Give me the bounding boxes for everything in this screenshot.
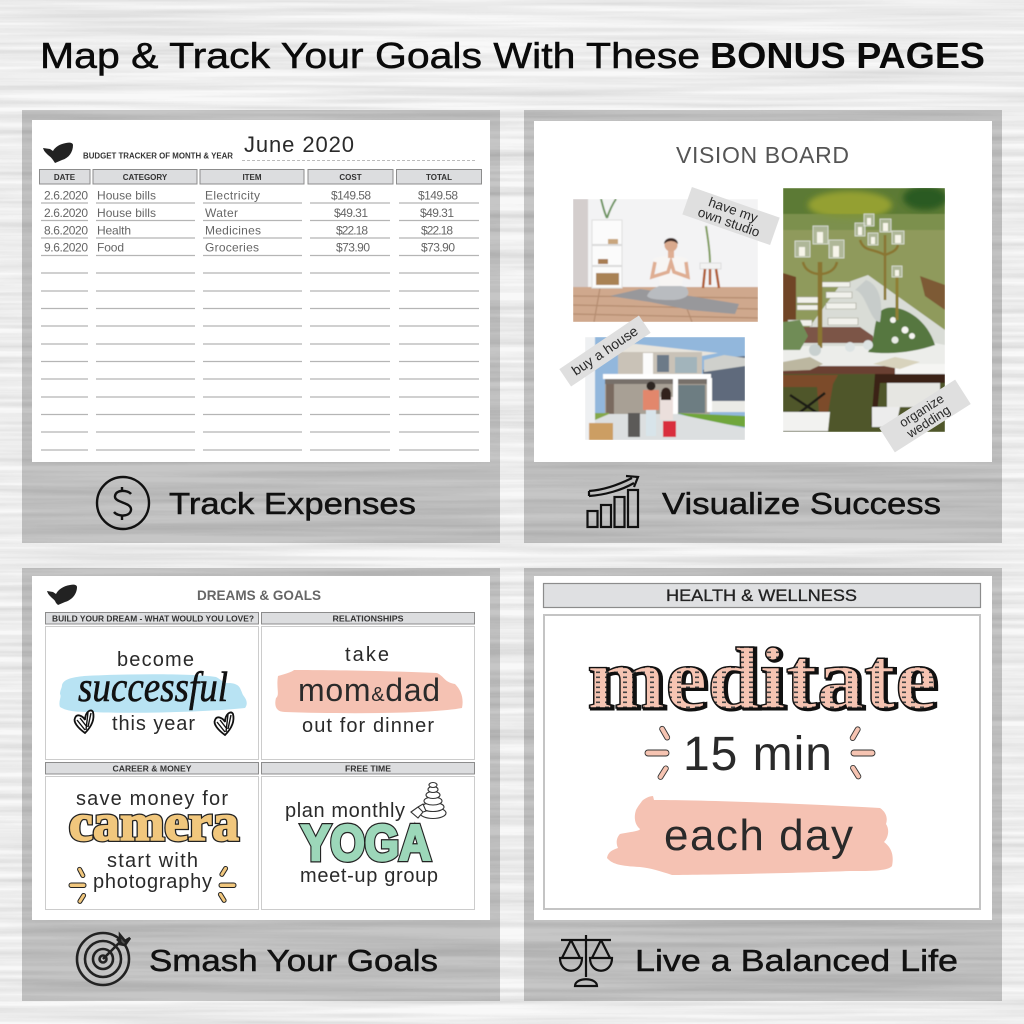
table header: CATEGORY	[123, 173, 168, 182]
goal cell: career and money: camera	[69, 795, 239, 852]
table rows: $22.18	[421, 224, 453, 238]
title: Map & Track Your Goals With These	[40, 35, 700, 76]
brush: pink	[275, 670, 463, 713]
photo: wedding table	[783, 186, 947, 432]
label: have my own studio: have my	[707, 194, 760, 225]
table rows: $49.31	[334, 206, 368, 220]
goal cell: career and money: start with	[107, 850, 198, 872]
table rows: $73.90	[336, 240, 370, 254]
goal cell: free time: FREE TIME	[345, 764, 391, 774]
photo: yoga studio	[573, 199, 758, 322]
label: have my own studio: own studio	[696, 204, 762, 240]
panel: visualize success	[524, 110, 1002, 543]
label: organize wedding: wedding	[903, 402, 953, 441]
panel: track expenses	[22, 110, 500, 543]
dreams and goals heading: DREAMS & GOALS	[197, 587, 321, 603]
decorative bursts	[69, 866, 236, 904]
goal cell: career and money: camera	[69, 795, 239, 852]
title: BONUS PAGES	[710, 35, 985, 76]
text: each day: each day	[664, 811, 853, 860]
dashed rule	[242, 160, 477, 162]
table rows: $73.90	[421, 240, 455, 254]
goal cell: relationships: mom&dad	[298, 672, 440, 708]
table rows: $49.31	[420, 206, 454, 220]
health and wellness header: HEALTH & WELLNESS	[666, 586, 857, 605]
goal cell: relationships	[262, 612, 474, 760]
icon: dollar	[97, 477, 149, 529]
icon: whale logo	[43, 143, 73, 163]
icon: balance scales	[560, 935, 612, 986]
frame	[544, 615, 980, 909]
icon: heart right	[215, 712, 234, 735]
table rows: Water	[205, 206, 238, 220]
goal cell: dream	[46, 612, 258, 760]
table rows: 2.6.2020	[44, 206, 88, 220]
text: 15 min: 15 min	[683, 728, 832, 781]
word: meditate: meditate	[589, 632, 939, 729]
title	[40, 35, 985, 76]
label: buy a house: buy a house	[569, 323, 641, 379]
goal cell: dream: successful	[78, 665, 228, 711]
month heading: June 2020	[244, 132, 354, 157]
goal cell: career and money	[46, 762, 258, 910]
goal cell: dream: this year	[112, 713, 195, 735]
table header: DATE	[54, 173, 76, 182]
label: have my own studio	[682, 187, 780, 245]
word: meditate: meditate	[587, 631, 937, 728]
table rows: Health	[97, 224, 131, 238]
icon: heart left	[75, 710, 94, 733]
table rows: $149.58	[331, 188, 371, 202]
icon: whale logo	[47, 585, 77, 605]
table rows: Groceries	[205, 240, 259, 254]
caption: track expenses: Track Expenses	[169, 486, 416, 521]
vision board heading: VISION BOARD	[676, 142, 849, 168]
table rows	[41, 188, 479, 450]
label: organize wedding: organize	[896, 391, 947, 430]
table rows: House bills	[97, 206, 156, 220]
photo: house	[585, 337, 745, 440]
table rows: Food	[97, 240, 124, 254]
label: organize wedding	[879, 380, 971, 452]
table rows: 2.6.2020	[44, 188, 88, 202]
goal cell: dream: become	[117, 649, 194, 671]
decorative bursts	[645, 725, 875, 780]
label: buy a house	[559, 315, 651, 387]
goal cell: career and money: CAREER & MONEY	[112, 764, 192, 774]
icon: growth chart	[588, 476, 638, 527]
budget tracker heading: BUDGET TRACKER OF MONTH & YEAR	[83, 152, 233, 160]
table rows: $149.58	[418, 188, 458, 202]
goal cell: free time: YOGA	[301, 815, 431, 871]
caption: visualize success: Visualize Success	[662, 486, 941, 521]
caption: balanced life: Live a Balanced Life	[635, 943, 958, 978]
goal cell: free time: plan monthly	[285, 800, 405, 822]
goal cell: relationships: take	[345, 644, 389, 666]
table rows: House bills	[97, 188, 156, 202]
table rows: 9.6.2020	[44, 240, 88, 254]
goal cell: career and money: save money for	[76, 788, 228, 810]
goal cell: free time: meet-up group	[300, 865, 438, 887]
brush: blue	[59, 674, 247, 713]
brush: each day	[607, 796, 893, 875]
caption: smash your goals: Smash Your Goals	[149, 943, 438, 978]
health and wellness header	[544, 584, 980, 608]
table rows: 8.6.2020	[44, 224, 88, 238]
icon: stacked stones	[411, 782, 446, 818]
panel: smash your goals	[22, 568, 500, 1001]
goal cell: relationships: out for dinner	[302, 715, 434, 737]
table rows: $22.18	[336, 224, 368, 238]
table header: COST	[339, 173, 362, 182]
table header	[40, 170, 482, 184]
goal cell: career and money: photography	[93, 871, 212, 893]
table rows: Electricity	[205, 188, 260, 202]
table rows: Medicines	[205, 224, 261, 238]
table header: ITEM	[242, 173, 262, 182]
table header: TOTAL	[426, 173, 452, 182]
goal cell: free time	[262, 762, 474, 910]
goal cell: relationships: RELATIONSHIPS	[332, 614, 404, 624]
goal cell: dream: BUILD YOUR DREAM - WHAT WOULD YOU LOVE?	[52, 614, 254, 624]
goal cell: free time: YOGA	[301, 815, 431, 871]
icon: target	[77, 933, 130, 985]
panel: balanced life	[524, 568, 1002, 1001]
